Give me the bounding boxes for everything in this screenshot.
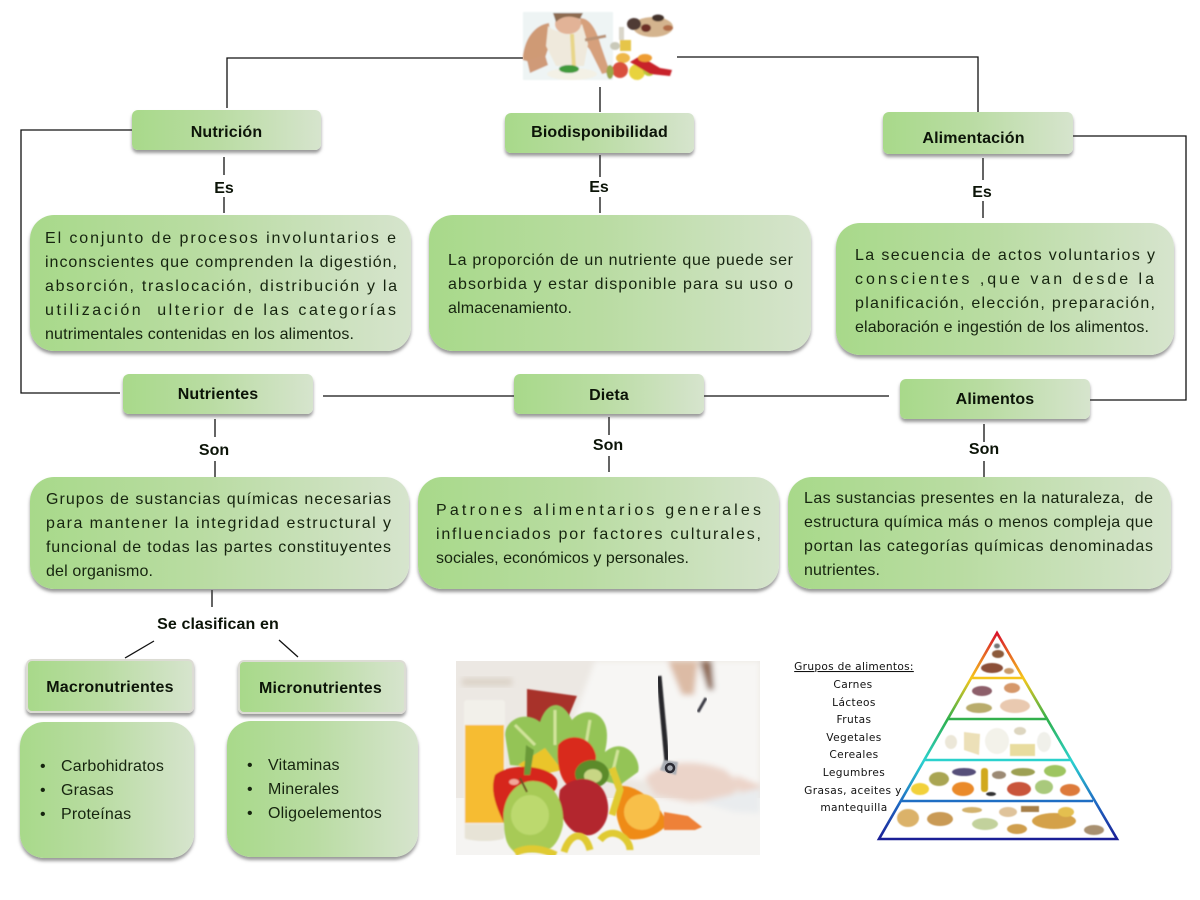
pyramid food: [897, 644, 1104, 835]
panel: definición de alimentación: La secuencia de actos voluntarios y: [855, 247, 1155, 264]
pyramid legend: Grupos de alimentos:: [794, 661, 914, 673]
panel: definición de alimentos: portan las categorías químicas denominadas: [804, 538, 1153, 555]
panel: definición de nutrición: inconscientes que comprenden la digestión,: [45, 254, 397, 271]
label: Son (Alimentos): Son: [969, 441, 999, 458]
panel: definición de biodisponibilidad: La proporción de un nutriente que puede ser: [448, 252, 794, 269]
node: Nutrición: Nutrición: [191, 124, 262, 141]
panel: definición de dieta: influenciados por factores culturales,: [436, 526, 761, 543]
panel: definición de nutrientes: para mantener la integridad estructural y: [46, 515, 391, 532]
label: Se clasifican en: Se clasifican en: [157, 616, 279, 633]
panel: definición de nutrientes: Grupos de sustancias químicas necesarias: [46, 491, 391, 508]
panel: lista de macronutrientes: Proteínas: [61, 806, 131, 823]
node: Dieta: [514, 374, 704, 414]
node: Biodisponibilidad: Biodisponibilidad: [531, 124, 668, 141]
panel: definición de nutrición: absorción, traslocación, distribución y la: [45, 278, 397, 295]
pyramid legend: [794, 661, 914, 814]
node: Nutrientes: [123, 374, 313, 414]
panel: definición de nutrición: nutrimentales contenidas en los alimentos.: [45, 326, 354, 343]
node: Dieta: Dieta: [589, 387, 629, 404]
panel: definición de alimentos: Las sustancias presentes en la naturaleza, de: [804, 490, 1153, 507]
panel: lista de macronutrientes: Carbohidratos: [61, 758, 164, 775]
node: Macronutrientes: Macronutrientes: [46, 679, 174, 696]
panel: definición de nutrición: El conjunto de procesos involuntarios e: [45, 230, 396, 247]
pyramid outline: [879, 633, 1117, 839]
pyramid legend: Lácteos: [832, 697, 876, 709]
panel: definición de alimentos: [788, 477, 1171, 589]
panel: lista de micronutrientes: •: [247, 805, 253, 822]
pyramid legend: Carnes: [833, 679, 873, 691]
node: Alimentos: Alimentos: [956, 391, 1034, 408]
panel: lista de micronutrientes: Vitaminas: [268, 757, 340, 774]
panel: definición de nutrientes: funcional de todas las partes constituyentes: [46, 539, 391, 556]
pyramid legend: Cereales: [829, 749, 879, 761]
pyramid legend: Grasas, aceites y: [804, 785, 902, 797]
panel: definición de alimentación: elaboración e ingestión de los alimentos.: [855, 319, 1149, 336]
panel: lista de macronutrientes: [20, 722, 194, 858]
panel: lista de macronutrientes: •: [40, 806, 46, 823]
panel: lista de macronutrientes: Grasas: [61, 782, 114, 799]
pyramid legend: Legumbres: [823, 767, 885, 779]
label: Son (Dieta): Son: [593, 437, 623, 454]
panel: definición de alimentación: conscientes ,que van desde la: [855, 271, 1154, 288]
panel: lista de micronutrientes: Minerales: [268, 781, 339, 798]
panel: definición de nutrición: [30, 215, 411, 351]
node: Nutrición: [132, 110, 321, 150]
panel: lista de micronutrientes: •: [247, 781, 253, 798]
label: Es (Biodisponibilidad): Es: [589, 179, 609, 196]
panel: definición de alimentación: planificación, elección, preparación,: [855, 295, 1155, 312]
label: Es (Nutrición): Es: [214, 180, 234, 197]
node: Macronutrientes: [26, 659, 194, 713]
label: Son (Nutrientes): Son: [199, 442, 229, 459]
panel: definición de nutrientes: del organismo.: [46, 563, 153, 580]
pyramid legend: mantequilla: [820, 802, 888, 814]
image: woman eating and food: [522, 12, 674, 81]
panel: lista de macronutrientes: •: [40, 758, 46, 775]
panel: lista de micronutrientes: [227, 721, 418, 857]
panel: lista de micronutrientes: •: [247, 757, 253, 774]
node: Micronutrientes: Micronutrientes: [259, 680, 382, 697]
node: Alimentos: [900, 379, 1090, 419]
node: Alimentación: Alimentación: [922, 130, 1025, 147]
pyramid legend: Vegetales: [826, 732, 882, 744]
panel: definición de alimentos: nutrientes.: [804, 562, 880, 579]
image: doctor with fruit and vegetables: [456, 661, 760, 855]
image: food group pyramid: [794, 630, 1120, 840]
panel: lista de micronutrientes: Oligoelementos: [268, 805, 382, 822]
panel: definición de biodisponibilidad: [429, 215, 811, 351]
pyramid legend: Frutas: [837, 714, 871, 726]
panel: definición de nutrientes: [30, 477, 409, 589]
panel: definición de dieta: [418, 477, 779, 589]
node: Micronutrientes: [238, 660, 406, 714]
label: Es (Alimentación): Es: [972, 184, 992, 201]
node: Alimentación: [883, 112, 1073, 154]
panel: definición de dieta: Patrones alimentarios generales: [436, 502, 761, 519]
node: Biodisponibilidad: [505, 113, 694, 153]
panel: definición de nutrición: utilización ulterior de las categorías: [45, 302, 396, 319]
panel: definición de alimentos: estructura química más o menos compleja que: [804, 514, 1153, 531]
node: Nutrientes: Nutrientes: [178, 386, 258, 403]
panel: definición de dieta: sociales, económicos y personales.: [436, 550, 689, 567]
panel: lista de macronutrientes: •: [40, 782, 46, 799]
panel: definición de biodisponibilidad: almacenamiento.: [448, 300, 572, 317]
panel: definición de biodisponibilidad: absorbida y estar disponible para su uso o: [448, 276, 793, 293]
panel: definición de alimentación: [836, 223, 1174, 355]
